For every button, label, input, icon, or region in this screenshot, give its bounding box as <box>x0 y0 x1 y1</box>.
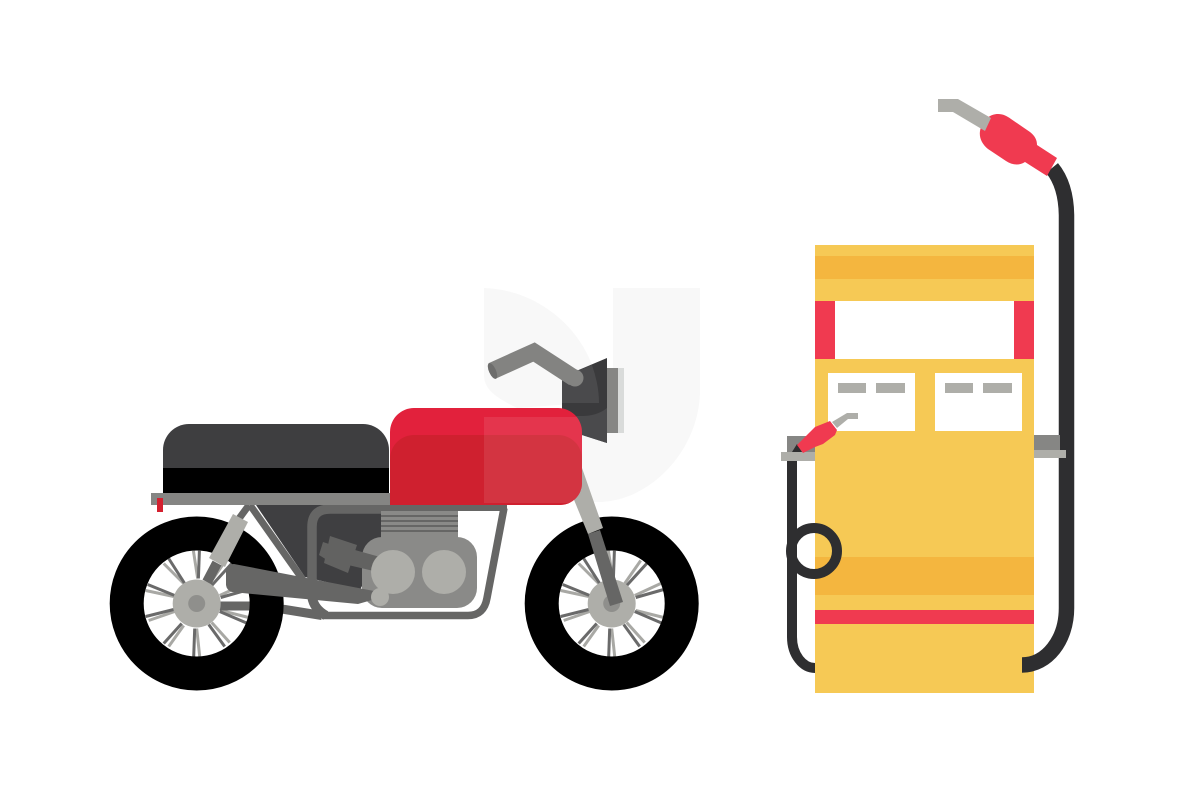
rear wheel <box>127 534 322 674</box>
tank highlight overlay <box>484 417 582 503</box>
top dark stripe <box>815 256 1034 279</box>
rear wheel spokes <box>146 551 249 656</box>
engine crankcase <box>226 536 477 608</box>
big nozzle <box>938 99 1057 176</box>
swingarm rod <box>215 606 322 616</box>
frame triangle panel <box>256 505 385 590</box>
red band <box>815 610 1034 624</box>
left hose with loop <box>791 450 837 668</box>
rear frame bar <box>151 493 391 512</box>
watermark shape <box>484 288 700 502</box>
front wheel <box>542 534 682 674</box>
fuel pump body <box>815 245 1034 693</box>
right display <box>935 373 1022 431</box>
handlebar <box>486 352 584 386</box>
small nozzle <box>792 413 858 453</box>
front wheel spokes <box>561 551 664 656</box>
headlight <box>562 358 624 443</box>
lower dark band <box>815 557 1034 595</box>
front tyre <box>542 534 682 674</box>
pump window <box>815 301 1034 359</box>
fuel tank <box>390 408 582 505</box>
front fork <box>570 468 623 606</box>
left nozzle holder <box>781 436 815 461</box>
engine cooling fins <box>381 511 458 538</box>
right nozzle holder <box>1034 435 1066 458</box>
left display <box>828 373 915 431</box>
tail light <box>157 498 163 512</box>
carburettor block <box>319 536 380 573</box>
rear shock absorber <box>207 514 248 582</box>
illustration: motorcycle and fuel pump <box>110 99 1074 693</box>
seat <box>163 424 389 493</box>
frame tubes <box>238 505 507 616</box>
rear hub <box>173 580 221 628</box>
right hose <box>1022 168 1066 665</box>
front hub <box>588 580 636 628</box>
exhaust pipe <box>226 564 374 604</box>
window right post <box>1014 301 1034 359</box>
rear tyre <box>127 534 267 674</box>
window left post <box>815 301 835 359</box>
